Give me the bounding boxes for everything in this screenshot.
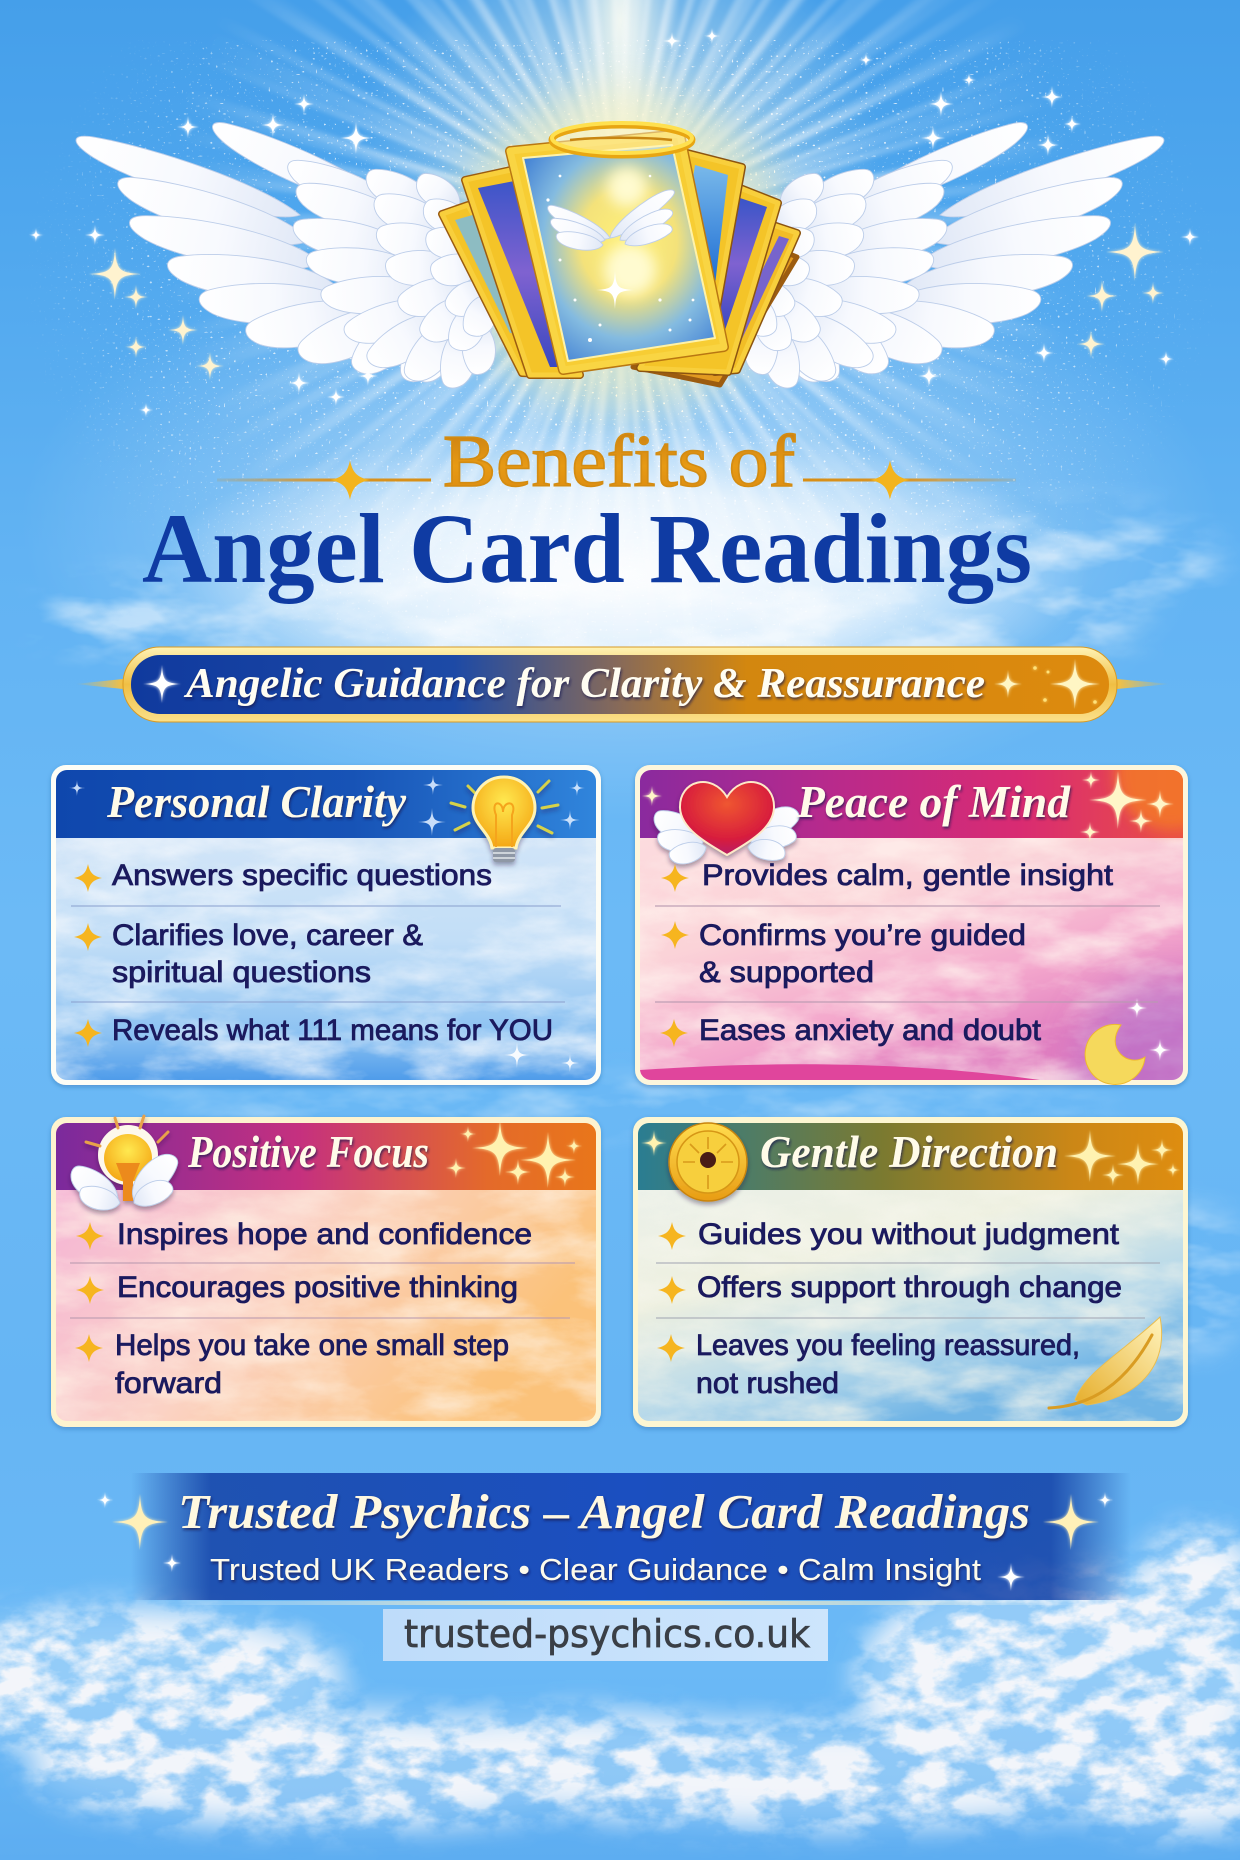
panel: Personal Clarity bbox=[51, 765, 601, 1085]
subtitle ribbon bbox=[75, 647, 1170, 722]
soft mid-page clouds bbox=[40, 510, 1240, 1350]
bottom clouds bbox=[0, 1530, 1240, 1830]
benefit list: Eases anxiety and doubt bbox=[699, 1014, 1042, 1047]
panel body and header bbox=[638, 1123, 1183, 1421]
primary feathers bbox=[70, 112, 494, 391]
title: Angel Card Readings: Angel Card Readings bbox=[142, 493, 1032, 604]
benefit list: Inspires hope and confidence bbox=[117, 1218, 532, 1251]
benefit list: Encourages positive thinking bbox=[117, 1271, 518, 1304]
decorative lines and stars bbox=[217, 460, 1016, 500]
panel body and header bbox=[56, 770, 596, 1080]
benefit list: Confirms you’re guided bbox=[699, 919, 1026, 952]
ribbon spikes bbox=[75, 679, 1170, 689]
sun rays bbox=[194, 0, 1042, 508]
card glow spots bbox=[604, 167, 656, 296]
card sparkle bbox=[546, 175, 694, 342]
benefit list: Answers specific questions bbox=[112, 859, 492, 892]
icon: gold compass bbox=[669, 1123, 747, 1201]
benefit list: Guides you without judgment bbox=[698, 1218, 1120, 1251]
icon: winged bulb bbox=[64, 1116, 184, 1215]
sparkles around wings bbox=[29, 28, 1199, 417]
panel body and header bbox=[56, 1123, 596, 1421]
title: Benefits of bbox=[217, 421, 1016, 503]
divider lines bbox=[655, 906, 1160, 1002]
card mini wings bbox=[544, 184, 678, 254]
footer banner: Trusted Psychics – Angel Card Readings bbox=[178, 1484, 1030, 1539]
left back cards bbox=[442, 168, 580, 375]
footer stars bbox=[97, 1492, 1113, 1591]
panel: Positive Focus: Positive Focus bbox=[187, 1127, 429, 1177]
benefit list: Helps you take one small step bbox=[115, 1329, 509, 1362]
benefit list: forward bbox=[115, 1367, 222, 1400]
divider lines bbox=[656, 1263, 1160, 1318]
header sparkles bbox=[446, 1120, 582, 1188]
panel: Personal Clarity: Personal Clarity bbox=[106, 777, 407, 827]
right wing bbox=[734, 112, 1170, 393]
halo bbox=[552, 123, 692, 155]
benefit list bbox=[74, 859, 553, 1047]
benefit list: Provides calm, gentle insight bbox=[702, 859, 1114, 892]
benefit list: spiritual questions bbox=[112, 956, 371, 989]
divider lines bbox=[70, 1263, 575, 1318]
benefit list bbox=[657, 1218, 1122, 1400]
panel: Gentle Direction bbox=[633, 1117, 1188, 1427]
benefit list bbox=[75, 1218, 532, 1400]
benefit list: Leaves you feeling reassured, bbox=[696, 1329, 1080, 1362]
panel: Gentle Direction: Gentle Direction bbox=[760, 1127, 1058, 1177]
panel: Peace of Mind bbox=[635, 720, 1240, 1160]
right back cards bbox=[640, 153, 797, 372]
benefit list: Reveals what 111 means for YOU bbox=[112, 1014, 553, 1047]
header sparkles bbox=[69, 775, 585, 1072]
panel: Positive Focus bbox=[51, 1116, 601, 1427]
benefit list: & supported bbox=[699, 956, 874, 989]
icon: winged heart bbox=[649, 782, 803, 867]
panel body and header bbox=[640, 770, 1183, 1080]
benefit list: not rushed bbox=[696, 1367, 839, 1400]
website address: trusted-psychics.co.uk bbox=[404, 1612, 810, 1656]
header sparkles bbox=[642, 771, 1174, 1061]
panel: Peace of Mind: Peace of Mind bbox=[796, 777, 1072, 827]
ribbon stars bbox=[143, 659, 1100, 709]
icon: crescent moon bbox=[1085, 1024, 1145, 1084]
footer banner: Trusted UK Readers • Clear Guidance • Calm Insight bbox=[210, 1552, 981, 1587]
title: Benefits of: Benefits of bbox=[443, 421, 795, 503]
icon: light bulb bbox=[451, 777, 558, 862]
benefit list bbox=[660, 859, 1114, 1047]
angel tarot cards bbox=[442, 123, 797, 385]
benefit list: Clarifies love, career & bbox=[112, 919, 423, 952]
left wing bbox=[70, 112, 506, 393]
footer banner bbox=[97, 1473, 1131, 1605]
main card bbox=[510, 134, 724, 370]
icon: golden feather bbox=[1049, 1317, 1162, 1408]
divider lines bbox=[71, 906, 565, 1002]
subtitle ribbon: Angelic Guidance for Clarity & Reassurance bbox=[183, 661, 985, 707]
header sparkles bbox=[641, 1130, 1180, 1186]
gold underline bbox=[153, 1601, 1103, 1605]
glow behind cards bbox=[450, 90, 790, 410]
covert feathers bbox=[281, 151, 506, 393]
benefit list: Offers support through change bbox=[697, 1271, 1122, 1304]
star dust field bbox=[34, 40, 1202, 646]
back gold card edges bbox=[633, 250, 797, 385]
